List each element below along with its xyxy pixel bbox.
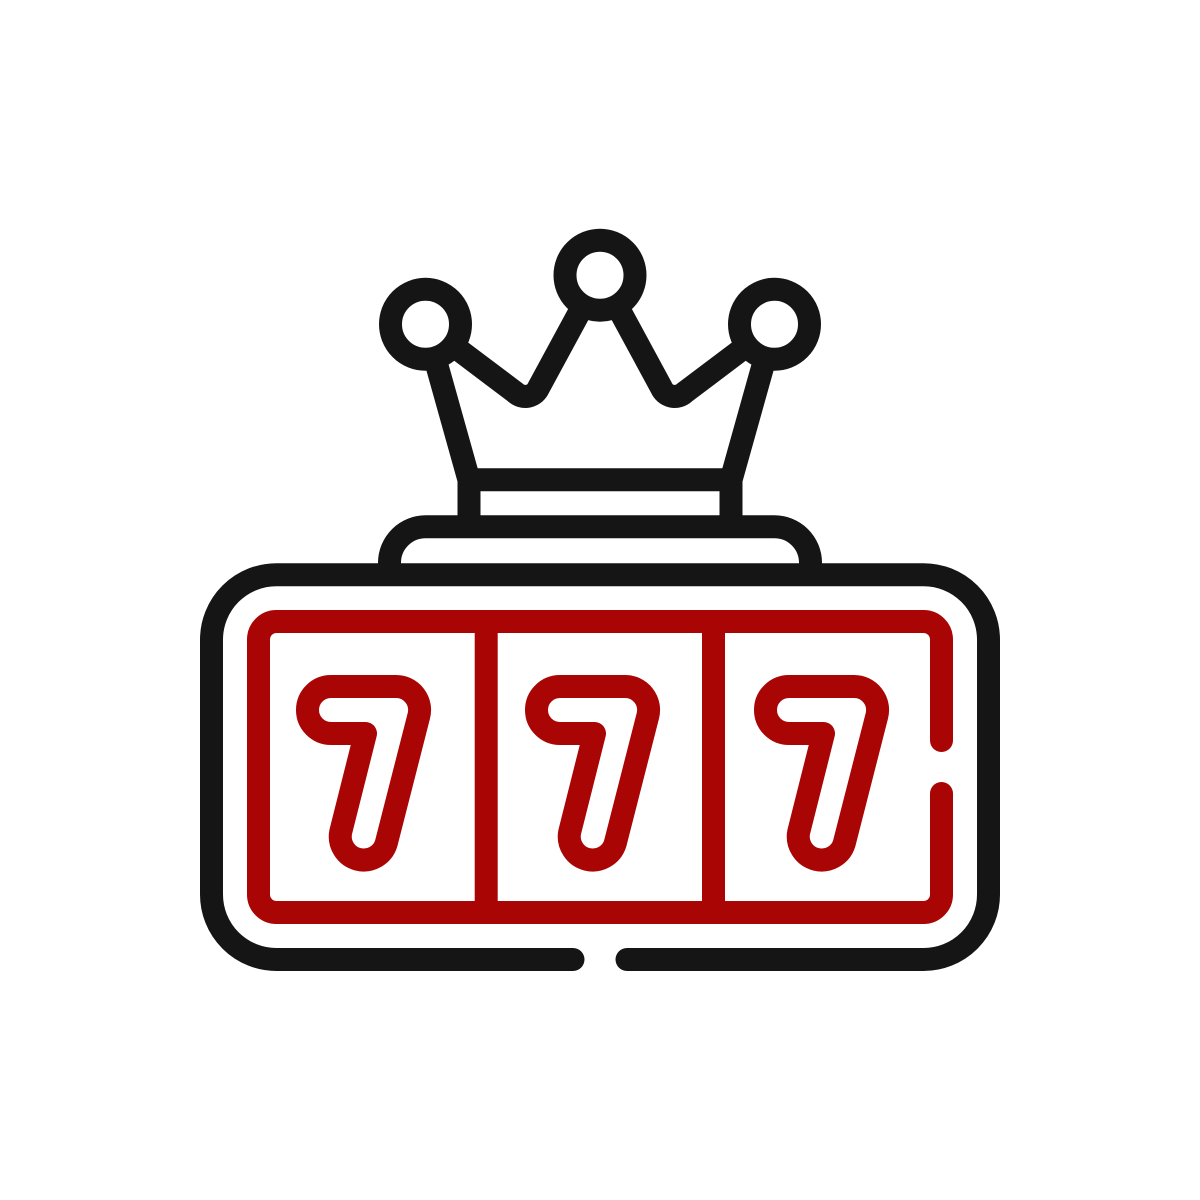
crown — [390, 240, 810, 526]
reel dividers — [486, 622, 714, 912]
crown jewel right — [740, 289, 810, 359]
reel 3 number seven — [766, 686, 878, 860]
reel 2 number seven — [536, 686, 649, 860]
machine top cap — [390, 527, 810, 574]
crown jewel left — [390, 289, 460, 359]
crown jewel centre — [565, 240, 635, 310]
machine body — [212, 575, 988, 960]
crown outline — [438, 314, 762, 526]
reels frame — [258, 622, 942, 912]
reel 1 number seven — [308, 686, 420, 860]
